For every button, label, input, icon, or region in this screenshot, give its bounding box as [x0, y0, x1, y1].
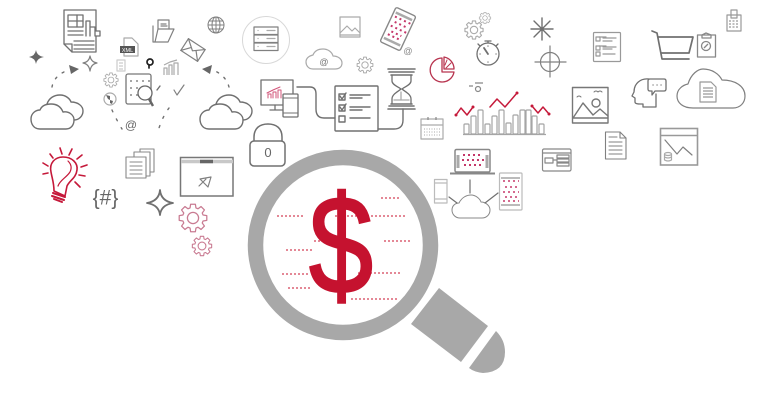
icon: red light bulb: [43, 148, 87, 202]
arrow: dotted arc under right: [159, 108, 169, 128]
icon: office building: [727, 10, 741, 31]
icon: large sparkle: [147, 190, 173, 215]
icon: xml file: XML: [122, 48, 133, 54]
icon: image frame: [340, 17, 360, 37]
icon: lock: [250, 124, 285, 166]
icon: monitor with phone: [261, 80, 298, 117]
dollar sign: $: [309, 168, 373, 324]
icon: check mark: [174, 85, 184, 95]
icon: hourglass: [388, 69, 415, 109]
icon: central cloud with links: [449, 180, 498, 218]
icon: search pin: [147, 59, 153, 68]
icon: asterisk: [531, 18, 553, 40]
icon: newspaper report: [64, 10, 100, 52]
icon: small dial: [469, 83, 483, 92]
arrow: dotted arc left: [52, 65, 79, 87]
icon: small growth chart: [164, 60, 178, 75]
icon: gear outline: [357, 57, 373, 73]
magnifier: lens ring and handle: [256, 158, 505, 373]
icon: tilted phone with data: [380, 7, 416, 51]
icon: crosshair: [535, 46, 566, 77]
icon: red gear small: [192, 236, 212, 256]
icon: chart window: [660, 128, 698, 165]
icon: landscape picture: [572, 88, 608, 123]
icon: flow diagram window: [542, 149, 571, 171]
icon: pie chart: [430, 57, 454, 82]
icon: folder: [153, 20, 174, 42]
icon: cloud left: [31, 95, 83, 129]
icon: small globe: [104, 93, 116, 105]
icon: head with speech bubble: [632, 79, 666, 107]
icon: cloud right: [200, 95, 252, 129]
icon: data table with magnifier: [126, 74, 153, 106]
icon: stopwatch: [477, 41, 499, 65]
magnifier: dotted data rows: [277, 198, 412, 299]
icon: shopping cart: [652, 31, 693, 59]
icon: gears pair: [465, 12, 491, 39]
arrow: dotted arc under left: [112, 110, 122, 129]
icon: phone outline: [434, 180, 447, 203]
icon: document: [606, 132, 626, 159]
arrow: connector monitor to checklist: [297, 87, 335, 118]
icon: hash braces: {#}: [93, 186, 118, 210]
icon: globe: [208, 17, 224, 33]
icon: at cloud: @: [319, 57, 329, 67]
icon: server circle: [242, 16, 290, 64]
icon: laptop with data: [450, 150, 495, 174]
icon: solid sparkle: [29, 50, 44, 64]
icon: small at sign: @: [403, 46, 413, 56]
icon: calendar: [421, 117, 443, 139]
icon: xml file: [120, 38, 138, 56]
icon: small document: [117, 60, 125, 71]
icon: clipboard: [698, 33, 716, 57]
icon: task list card: [594, 32, 620, 62]
icon: red gear large: [179, 204, 207, 232]
icon: lock: 0: [264, 145, 272, 160]
arrow: connector checklist to hourglass: [378, 109, 403, 129]
icon: envelope: [181, 39, 205, 61]
icon: document stack: [126, 149, 154, 178]
icon: browser window with cursor: [180, 158, 233, 196]
chart: bars with red trend lines: [454, 92, 550, 134]
icon: pin dots: [157, 86, 160, 90]
icon: gear grey: [104, 73, 118, 87]
icon: at cloud: [306, 49, 342, 69]
icon: at sign: @: [125, 118, 137, 132]
icon: cloud with document: [677, 69, 745, 108]
icon: tablet with data: [500, 173, 522, 210]
icon: checklist: [335, 86, 378, 131]
icon: outline sparkle: [83, 56, 97, 71]
arrow: dotted arc right: [202, 65, 229, 87]
